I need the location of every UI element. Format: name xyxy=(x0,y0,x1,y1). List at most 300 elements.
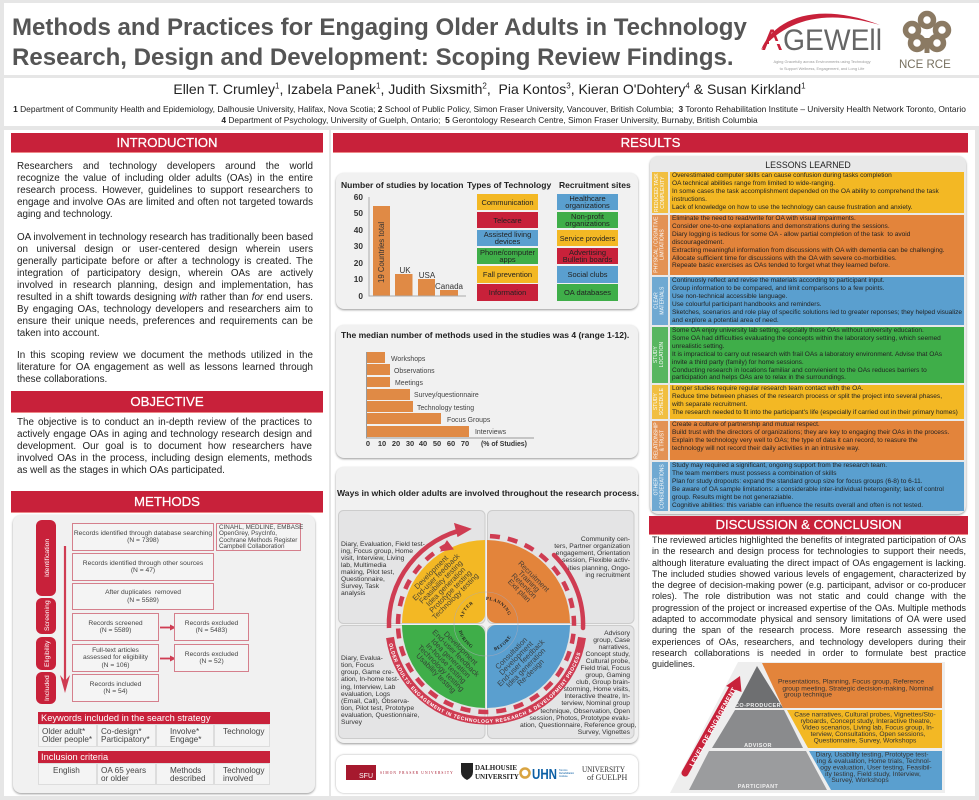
logo: AGE-WELL: GEWEll xyxy=(783,24,882,57)
box: databases: CINAHL, MEDLINE, EMBASE xyxy=(219,524,303,531)
lesson: clear materials: Group information to be compared, and limit comparisons to a few points. xyxy=(672,285,885,292)
lesson: physical cognitive limitations: Extracting meaningful information from discussions with OA with dementia can be challenging. xyxy=(672,247,945,254)
keywords heading xyxy=(38,712,270,724)
lesson: physical cognitive limitations: Repeate basic exercises as OAs tended to forget what they learned before. xyxy=(672,262,890,269)
technology types: Fall prevention xyxy=(483,270,532,279)
bar chart: methods: 20 xyxy=(392,439,400,448)
recruitment sites: organizations xyxy=(565,219,610,228)
text: discussion: guidelines. xyxy=(652,659,695,669)
lesson: study location: LOCATION xyxy=(659,342,665,368)
recruitment sites: Bulletin boards xyxy=(563,255,612,264)
text: discussion: roles). The role distribution was not static and could change with the xyxy=(652,591,966,601)
stage labels: PLANNING xyxy=(486,596,511,615)
heading: discussion and conclusion: DISCUSSION & CONCLUSION xyxy=(715,517,902,532)
logo: NCE RCE: NCE RCE xyxy=(899,59,951,71)
text: introduction: resulted in a shift towards designing with rather than for end users. xyxy=(17,292,313,303)
text: after methods: analysis xyxy=(341,590,365,597)
text: before methods: narratives, xyxy=(598,644,630,651)
text: introduction: engage and involve OAs are limited and often not targeted towards xyxy=(17,197,313,208)
box: excluded 5483: Records excluded xyxy=(185,620,238,627)
text: planning methods: ities planning, Ongo- xyxy=(568,565,630,572)
lesson: other considerations: Cognitive abilities: this variable can influence the results overall and often is not tested. xyxy=(672,502,923,509)
bar chart: methods: (% of Studies) xyxy=(481,441,527,448)
lesson: other considerations: The team members must possess a combination of skills xyxy=(672,470,836,477)
box: full-text: (N = 106) xyxy=(101,662,130,669)
bar chart: methods: 50 xyxy=(433,439,441,448)
bar chart: methods: 40 xyxy=(419,439,427,448)
text: discussion: The included studies showed various levels of engagement, characterized by xyxy=(652,569,966,579)
wedge text xyxy=(406,547,556,699)
wedge text: Feasibility testing xyxy=(417,558,464,605)
bar chart: methods: 0 xyxy=(366,439,370,448)
box: included: (N = 54) xyxy=(103,688,128,695)
pyramid: level of engagement: Survey, Workshops xyxy=(831,777,889,784)
bar chart: studies by location: UK xyxy=(399,266,411,275)
bar chart: methods: 60 xyxy=(447,439,455,448)
pyramid: level of engagement: Diary, Usability testing, Prototype test- xyxy=(816,752,928,758)
bar chart: methods: 70 xyxy=(461,439,469,448)
wedge text: Development xyxy=(412,553,451,591)
text: after methods: Questionnaire, xyxy=(341,576,385,583)
bar chart: studies by location: 20 xyxy=(354,258,363,268)
lesson: reduced task complexity: Overestimated computer skills can cause confusion during tasks completion xyxy=(672,172,892,179)
box: database records: (N = 7398) xyxy=(127,537,159,544)
pyramid: level of engagement: LEVEL OF ENGAGEMENT xyxy=(689,686,738,768)
text: planning methods: ters, Partner organization xyxy=(554,543,630,550)
lesson: physical cognitive limitations: PHYSICAL / COGNITIVE xyxy=(653,217,659,273)
box: database records: Records identified through database searching xyxy=(74,530,212,537)
stage: included xyxy=(36,672,56,704)
panel: methods flow: Technology xyxy=(223,766,264,775)
lesson: other considerations: group. Results might be not generaziable. xyxy=(672,494,793,501)
text: discussion: progression of the project or increased expertise of the OAs. Multiple methods xyxy=(652,603,966,613)
stage labels: AFTER xyxy=(460,602,474,618)
pyramid: level of engagement: Case narratives, Cultural probes, Vignettes/Sto- xyxy=(794,712,936,718)
bar chart: methods: Meetings xyxy=(395,380,424,387)
technology types: Assisted living xyxy=(484,230,531,239)
box: duplicates removed: (N = 5589) xyxy=(127,596,159,604)
text: introduction: literature for OA engagement as well as lessons learned through xyxy=(17,362,313,373)
wedge text: End-user feedback xyxy=(495,637,546,688)
panel: methods chart xyxy=(336,325,638,458)
panel: methods flow: described xyxy=(170,774,206,783)
bar chart: studies by location: 10 xyxy=(354,274,363,284)
wedge text: Development xyxy=(442,629,480,668)
recruitment sites: Healthcare xyxy=(569,194,606,203)
bar chart: studies by location: 60 xyxy=(354,192,363,202)
pyramid: level of engagement: Questionnaire, Survey, Workshops xyxy=(814,738,917,744)
bar chart: methods: 10 xyxy=(378,439,386,448)
heading: introduction: INTRODUCTION xyxy=(116,135,218,150)
pyramid: level of engagement: Presentations, Planning, Focus group, Reference xyxy=(778,678,924,686)
text: objective xyxy=(17,417,312,476)
box: database records xyxy=(72,523,214,551)
box: included: Records included xyxy=(90,681,141,688)
text: before methods: Advisory xyxy=(604,630,630,637)
technology types: apps xyxy=(499,255,516,264)
pyramid: level of engagement: group technique xyxy=(784,692,832,698)
engagement arrow xyxy=(685,687,733,773)
panel: methods flow: Technology xyxy=(223,727,264,736)
lesson: study location: Some OA enjoy university lab setting, espcially those OAs without university education. xyxy=(672,327,924,334)
lesson: other considerations: Be aware of OA sample limitations: a considerable inter-individual heterogenity; lack of control xyxy=(672,486,944,493)
box: excluded 52: (N = 52) xyxy=(199,658,224,665)
panel: location, technology, recruitment xyxy=(336,173,638,309)
text: planning methods: ing recruitment xyxy=(585,572,630,579)
text: before methods: storming, Home visits, xyxy=(564,686,630,693)
wedge text: Idea generation xyxy=(429,637,472,680)
box: screened xyxy=(72,613,159,641)
panel: methods flow: or older xyxy=(101,774,129,783)
box: full-text xyxy=(72,644,159,672)
wedge text: Idea generation xyxy=(504,646,547,689)
lesson: clear materials: Use non-technical accessible language. xyxy=(672,293,787,300)
lesson: reduced task complexity: OA technical abilities range from limited to wide-ranging. xyxy=(672,180,835,187)
logo: Guelph: of GUELPH xyxy=(587,773,627,782)
lesson: study schedule xyxy=(652,385,964,419)
panel: methods flow: Methods xyxy=(170,766,201,775)
lesson: study location xyxy=(652,327,964,383)
lesson: reduced task complexity: instructions. xyxy=(672,196,707,203)
logo: NCE RCE xyxy=(899,10,952,71)
stage: included: Included xyxy=(44,675,51,701)
stage labels: DURING xyxy=(458,630,472,648)
lesson: relationship and trust: & TRUST xyxy=(659,430,665,451)
text: planning methods: Community cen- xyxy=(581,536,630,543)
recruitment sites: organizations xyxy=(565,201,610,210)
text: before methods: technique, Observation, Open xyxy=(540,708,630,715)
pyramid: level of engagement: CO-PRODUCER xyxy=(735,703,781,709)
box: included xyxy=(72,674,159,702)
bar chart: studies by location: 19 Countries total xyxy=(377,222,386,283)
logo: UHN: Rehabilitation xyxy=(559,772,575,775)
logo: UHN xyxy=(519,766,575,783)
text: after methods: Diary, Evaluation, Field test- xyxy=(341,541,425,548)
wedge text: Development xyxy=(497,639,535,677)
recruitment sites: Non-profit xyxy=(571,212,604,221)
text: during methods: evaluation, Questionnaire, xyxy=(341,712,419,719)
text: objective: as well as the stages in which OAs participated. xyxy=(17,465,225,476)
text: before methods xyxy=(520,630,636,736)
text: introduction: taken into account. xyxy=(17,328,100,339)
logo: AGE-WELL: Aging Gracefully across Environments using Technology xyxy=(773,59,871,64)
technology types: Communication xyxy=(481,198,534,206)
panel: methods flow xyxy=(13,515,315,793)
text: after methods: ing, Focus group, Home xyxy=(341,548,413,555)
lesson: reduced task complexity: Lack of knowledge on how to use the technology can cause frustration and anxiety. xyxy=(672,204,912,211)
bar chart: methods: Observations xyxy=(394,368,435,375)
heading: introduction xyxy=(11,133,323,153)
lesson: study location: Conducting research in locations familiar and convienient to the OAs reduces barriers to xyxy=(672,367,927,374)
lesson: other considerations: OTHER xyxy=(653,478,659,495)
box: databases: OpenGrey, PsycInfo, xyxy=(219,530,277,537)
text: discussion: research collaborations is needed in order to formulate best practice xyxy=(652,648,966,658)
technology types: devices xyxy=(495,237,520,246)
logo: SFU: SFU xyxy=(359,773,373,780)
bar chart: studies by location: 40 xyxy=(354,225,363,235)
affiliations: 4 Department of Psychology, University of Guelph, Ontario; 5 Gerontology Research Centre, Simon Fraser University, Burnaby, British Columbia xyxy=(221,114,758,124)
text: introduction: integration of participatory design, wherein OAs are actively xyxy=(17,268,313,279)
authors: Ellen T. Crumley1, Izabela Panek1, Judith Sixsmith2, Pia Kontos3, Kieran O'Dohtery4 & Susan Kirkland1 xyxy=(173,81,806,97)
stage: identification xyxy=(36,520,56,596)
lesson: relationship and trust: Create a culture of partnership and mutual respect. xyxy=(672,421,820,428)
lesson: study schedule: SCHEDULE xyxy=(659,388,665,416)
inclusion cells xyxy=(38,763,97,785)
bar chart: studies by location: USA xyxy=(419,271,436,280)
text: planning methods: engagement, Orientation xyxy=(556,550,630,557)
text: during methods: group, Game cre- xyxy=(341,669,394,676)
panel: methods flow: OA 65 years xyxy=(101,766,146,775)
stage: eligibility xyxy=(36,637,56,670)
text: before methods: group, Case xyxy=(593,637,630,644)
keyword cells: Older people* xyxy=(42,735,92,744)
text: before methods: terview, Nominal group xyxy=(561,700,630,707)
pyramid: level of engagement xyxy=(670,662,945,793)
text: introduction: on universal design or user-centered design wherein users xyxy=(17,244,313,255)
logo: Guelph xyxy=(582,765,628,782)
lesson: study location: unrealistic setting. xyxy=(672,343,724,350)
pyramid: level of engagement: ADVISOR xyxy=(744,743,772,749)
technology types xyxy=(477,194,538,301)
bar chart: methods: Workshops xyxy=(391,356,426,363)
lesson: clear materials: and explore a potential area of need. xyxy=(672,317,779,324)
text: discussion xyxy=(652,535,966,669)
text: during methods xyxy=(341,655,419,726)
heading: median methods: The median number of methods used in the studies was 4 (range 1-12). xyxy=(341,330,629,340)
pyramid: level of engagement: ing & evaluation, Home trials, Technol- xyxy=(817,758,931,765)
lesson: relationship and trust: Build trust with the directors of organizations; they are key to engaging their OAs in the process. xyxy=(672,429,949,436)
bar chart: studies by location: Canada xyxy=(435,282,464,291)
box: screened: (N = 5589) xyxy=(100,627,131,634)
text: during methods: evaluation, Logs xyxy=(341,691,390,698)
bar chart: studies by location: 30 xyxy=(354,241,363,251)
inclusion heading xyxy=(38,751,270,763)
column backgrounds xyxy=(4,130,329,796)
heading: ways involved: Ways in which older adults are involved throughout the research process. xyxy=(337,488,639,498)
lesson: study location: STUDY xyxy=(653,347,659,363)
bar chart: studies by location xyxy=(354,192,466,301)
text: objective: development. Our goal is to document how researchers have xyxy=(17,441,312,452)
text: during methods: Survey xyxy=(341,719,362,726)
pyramid: level of engagement: group meeting, Strategic decision-making, Nominal xyxy=(782,686,934,692)
text: discussion: although literature evaluating the direct impact of OAs engagement is lacking. xyxy=(652,558,966,568)
header band xyxy=(4,3,979,75)
lesson: study location: participation and helps OAs are to relax in the surroundings. xyxy=(672,374,846,381)
lesson: study location: It is impractical to carry out research with frail OAs a laboratory environment. Advise that OAs xyxy=(672,351,942,358)
panel: methods flow: Participatory* xyxy=(101,735,150,744)
text: discussion: during the span of the research process. More research assessing the xyxy=(652,625,966,635)
text: before methods: club, Group brain- xyxy=(576,679,630,686)
stage: identification: Identification xyxy=(44,539,51,577)
text: before methods: ation, Questionnaire, Reference group, xyxy=(520,722,636,729)
pyramid: level of engagement: Video scenarios, Living lab, Focus group, In- xyxy=(802,724,934,732)
lesson: reduced task complexity: In some cases the task accomplishment depended on the OA ability to comprehend the task xyxy=(672,188,939,195)
lesson: reduced task complexity: REDUCED TASK xyxy=(653,173,659,212)
lesson: clear materials: Use colourful participant handbooks and reminders. xyxy=(672,301,822,308)
logo: Dalhousie: DALHOUSIE xyxy=(475,764,517,772)
box: databases: Campbell Collaboration xyxy=(219,543,284,550)
wedge text: Exit plan xyxy=(506,577,533,604)
heading: types of technology: Types of Technology xyxy=(467,180,551,190)
lesson: relationship and trust: Explain the technology very well to OAs; the type of data it can record, to reasure the xyxy=(672,437,918,444)
logo: AGE-WELL: A xyxy=(762,24,782,57)
bar chart: methods: Interviews xyxy=(475,429,507,436)
text: after methods: visit, Interview, Living xyxy=(341,555,404,562)
box: other sources xyxy=(72,553,214,581)
wedge text: Idea generation xyxy=(424,565,467,608)
lesson: study schedule: STUDY xyxy=(653,394,659,410)
box: full-text: Full-text articles xyxy=(92,647,139,654)
wedge text: In-house testing xyxy=(424,641,468,685)
heading: results: RESULTS xyxy=(621,135,680,150)
bar chart: studies by location: 50 xyxy=(354,208,363,218)
text: introduction: involved in research planning, design and implementation, has xyxy=(17,280,313,291)
panel: methods flow: Co-design* xyxy=(101,727,142,736)
lesson: other considerations: CONSIDERATIONS xyxy=(659,464,665,509)
text: after methods: making, Pilot test, xyxy=(341,569,394,576)
stage: eligibility: Eligibility xyxy=(44,640,51,667)
text: before methods: Survey, Vignettes xyxy=(578,729,630,736)
recruitment sites: Social clubs xyxy=(567,270,608,279)
text: introduction: In this scoping review we document the methods utilized in the xyxy=(17,350,313,361)
heading: recruitment sites: Recruitment sites xyxy=(559,180,631,190)
pyramid tiers xyxy=(735,666,783,708)
wedge text: Training xyxy=(516,568,542,594)
text: introduction: recognize the value of including older adults (OAs) in the entire xyxy=(17,173,313,184)
text: before methods: Concept study, xyxy=(585,651,630,658)
box: excluded 5483: (N = 5483) xyxy=(196,627,227,634)
lesson: study schedule: The research needed to fit into the participant's life (especially if carried out in their primary homes) xyxy=(672,409,958,416)
text: introduction: By engaging OAs, technology developers and researchers aim to xyxy=(17,304,313,315)
logo: UHN: Institute xyxy=(559,775,568,778)
heading: methods xyxy=(11,491,323,513)
lesson: reduced task complexity xyxy=(652,172,964,213)
quadrant backgrounds xyxy=(338,510,634,738)
lesson: study schedule: Longer studies require regular research team contact with the OA. xyxy=(672,385,863,392)
keyword cells xyxy=(38,724,97,747)
box: screened: Records screened xyxy=(88,620,143,627)
text: planning methods xyxy=(554,536,630,579)
lesson: relationship and trust xyxy=(652,421,964,460)
lesson: clear materials xyxy=(652,277,964,325)
text: objective: actively engage OAs in aging and technology research design and xyxy=(17,429,312,440)
bar chart: methods: 30 xyxy=(406,439,414,448)
pyramid: level of engagement: PARTICIPANT xyxy=(738,784,779,790)
box: full-text: assessed for eligibility xyxy=(83,654,148,661)
text: introduction: ensure their unique needs, preferences and requirements can be xyxy=(17,316,313,327)
wedge text: Technology testing xyxy=(430,571,480,621)
lesson: physical cognitive limitations: Consider one-to-one explanations and demonstrations during the sessions. xyxy=(672,223,890,230)
bar chart: methods: Survey/questionnaire xyxy=(414,392,479,399)
panel: partner logos xyxy=(336,755,638,793)
pyramid: level of engagement: ity testing, Field study, Interview, xyxy=(825,771,921,778)
text: during methods: ation, In-home test- xyxy=(341,676,399,683)
text: introduction: research process. However, guidelines to support researchers to xyxy=(17,185,313,196)
text: discussion: experiences of OAs, researchers, and technology developers during their xyxy=(652,637,966,647)
text: after methods xyxy=(341,541,425,597)
bar chart: methods: Focus Groups xyxy=(447,417,491,424)
lesson: clear materials: MATERIALS xyxy=(659,287,665,315)
logo: AGE-WELL xyxy=(761,14,882,71)
text: discussion: adapted to accommodate physical and sensory limitations of OA were used xyxy=(652,614,966,624)
lesson: clear materials: CLEAR xyxy=(653,293,659,309)
wedge text: End-user feedback xyxy=(411,551,462,602)
heading: lessons learned: LESSONS LEARNED xyxy=(765,160,851,170)
panel: research process wheel xyxy=(336,467,638,743)
affiliations xyxy=(13,104,966,124)
box: duplicates removed xyxy=(72,583,214,610)
process wheel xyxy=(338,510,634,739)
box: excluded 5483 xyxy=(174,613,249,641)
heading: results xyxy=(333,133,968,153)
lesson: physical cognitive limitations: Eliminate the need to read/write for OA with visual impairments. xyxy=(672,215,856,222)
panel: methods flow: Engage* xyxy=(170,735,201,744)
text: before methods: Interactive theatre, In- xyxy=(564,693,630,700)
text: after methods: Survey, Task xyxy=(341,583,379,590)
wedge text: Prototype testing xyxy=(427,568,474,615)
heading: number of studies: Number of studies by location xyxy=(341,180,464,190)
text: during methods: Diary, Evalua- xyxy=(341,655,383,662)
text: during methods: tion, Focus xyxy=(341,662,374,669)
text: after methods: lab, Multimedia xyxy=(341,562,386,569)
heading: discussion and conclusion xyxy=(649,516,968,535)
lesson: study schedule: Reduce time between phases of the research process or split the project into several phases, xyxy=(672,393,942,400)
lesson: other considerations: Plan for study dropouts: expand the standard group size for focus groups (6-8) to 6-11. xyxy=(672,478,923,485)
lesson: clear materials: Continuosly reflect and revise the materials according to participant input. xyxy=(672,277,885,284)
bar chart: studies by location: 0 xyxy=(358,291,363,301)
text: introduction xyxy=(17,161,313,385)
logo: SFU: SIMON FRASER UNIVERSITY xyxy=(380,771,454,775)
box: excluded 52 xyxy=(174,644,249,672)
wedge text: End-user feedback xyxy=(430,628,481,679)
flow arrows xyxy=(60,546,174,693)
inclusion cells: English xyxy=(53,766,80,775)
lesson: physical cognitive limitations xyxy=(652,215,964,275)
technology types: Telecare xyxy=(493,216,522,224)
lesson: physical cognitive limitations: Diary logging is tedious for some OA - allow partial completion of the task to avoid xyxy=(672,231,910,238)
colored wedges xyxy=(402,540,485,623)
colored boxes xyxy=(762,663,942,708)
logo: UHN: Toronto xyxy=(559,769,568,772)
lesson: relationship and trust: RELATIONSHIP xyxy=(653,422,659,459)
lesson: physical cognitive limitations: Allocate sufficient time for discussions with the OA with severe co-morbidities. xyxy=(672,255,897,262)
panel: methods flow: involved xyxy=(223,774,253,783)
text: introduction: OA involvement in technology research has traditionally been based xyxy=(17,232,313,243)
text: introduction: generally participate before or after a technology is created. The xyxy=(17,256,313,267)
wedge text: Retention xyxy=(510,571,539,600)
box: databases: Cochrane Methods Register xyxy=(219,537,297,544)
text: before methods: Field trial, Focus xyxy=(580,665,630,672)
logo: Dalhousie xyxy=(461,763,519,781)
text: introduction: these collaborations. xyxy=(17,374,107,385)
box: other sources: Records identified through other sources xyxy=(83,560,203,567)
bar chart: methods xyxy=(366,352,534,448)
box: duplicates removed: After duplicates removed xyxy=(105,589,181,596)
logo: AGE-WELL: to Support Wellness, Engagement, and Long Life xyxy=(780,66,864,71)
text: planning methods: session, Flexible activ- xyxy=(562,557,630,564)
lesson: relationship and trust: technology will not record their daily activities in an intrusive way. xyxy=(672,445,860,452)
title: Research, Design and Development: Scoping Review Findings. xyxy=(12,44,734,71)
stage labels: BEFORE xyxy=(494,636,511,651)
panel: lessons learned xyxy=(650,156,966,514)
heading: methods: METHODS xyxy=(134,494,200,509)
text: discussion: in the research and design process for technologies to support their needs, xyxy=(652,546,966,556)
wedge text: Consultation xyxy=(493,635,529,671)
box: other sources: (N = 47) xyxy=(131,567,155,574)
recruitment sites: Service providers xyxy=(560,234,615,242)
box: databases xyxy=(216,523,301,551)
keywords heading: Keywords included in the search strategy xyxy=(41,713,211,723)
